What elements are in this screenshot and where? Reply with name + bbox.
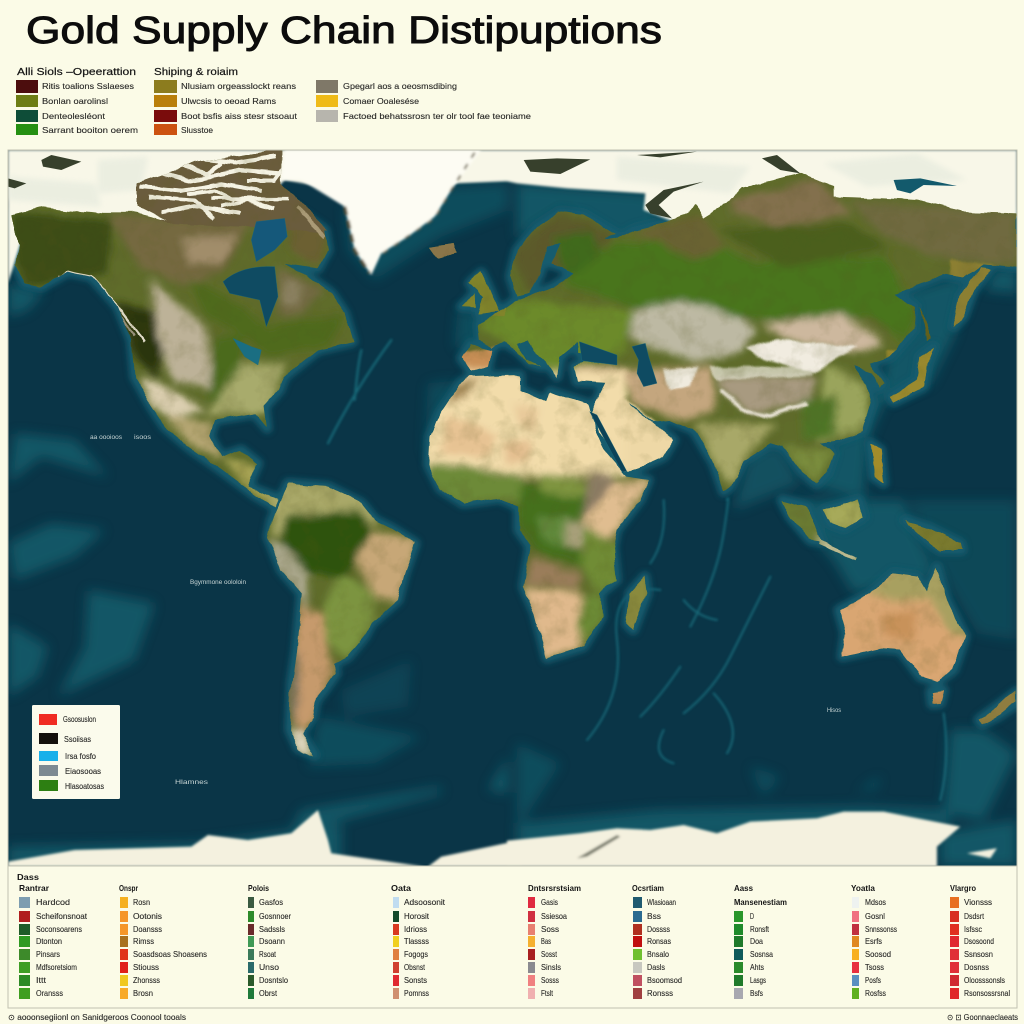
- legend column 8: Mdsos: [865, 898, 886, 907]
- biomes: australia and indonesia: [777, 500, 1020, 727]
- legend column 5: [528, 883, 581, 999]
- legend column 3: Rsoat: [259, 950, 277, 959]
- legend column 6: Dasls: [647, 963, 665, 972]
- biomes: iceland, british isles: [425, 240, 505, 317]
- legend column 1: Oransss: [36, 989, 63, 998]
- legend item: orange: [154, 124, 213, 135]
- legend column 8: Rosfss: [865, 989, 886, 998]
- legend column 8: Posfs: [865, 976, 881, 985]
- map border: [8, 150, 1017, 866]
- legend column 9: Dsdsrt: [964, 912, 985, 921]
- legend column 4: [391, 883, 446, 999]
- legend column 2: [119, 883, 207, 999]
- land mottling: [66, 156, 978, 730]
- legend column 5: Soss: [541, 925, 559, 934]
- legend column 8: Yoatla: [851, 883, 875, 893]
- legend column 9: Isfssc: [964, 925, 982, 934]
- legend column 6: Ocsrtiam: [632, 883, 664, 893]
- legend column 3: Gasfos: [259, 898, 283, 907]
- ocean streaks: [328, 340, 946, 800]
- legend column 2: Rimss: [133, 937, 154, 946]
- greenland: [281, 150, 481, 275]
- legend column 6: Dossss: [647, 925, 670, 934]
- legend column 1: Hardcod: [36, 898, 70, 907]
- legend item: dark red: Boot bsfis aiss stesr stsoaut: [181, 111, 298, 121]
- legend column 2: Zhonsss: [133, 976, 160, 985]
- legend column 9: Rsonsossrsnal: [964, 989, 1010, 998]
- legend header: operations: Alli Siols –Opeerattion: [17, 67, 136, 78]
- legend column 2: Soasdsoas Shoasens: [133, 950, 207, 959]
- legend item: dark teal green: [16, 110, 106, 122]
- legend column 7: Ronsft: [750, 925, 770, 934]
- legend column 8: Snnssonss: [865, 925, 897, 934]
- legend column 3: Dsoann: [259, 937, 285, 946]
- legend column 4: Obsnst: [404, 963, 426, 972]
- legend column 8: Tsoss: [865, 963, 884, 972]
- sea ice: [8, 150, 1017, 283]
- legend column 3: Gosnnoer: [259, 912, 291, 921]
- legend column 3: Obrst: [259, 989, 278, 998]
- legend column 5: Sinsls: [541, 963, 561, 972]
- legend column 2: Ootonis: [133, 912, 162, 921]
- legend column 9: Dosnss: [964, 963, 989, 972]
- legend column 4: Horosit: [404, 912, 430, 921]
- map labels: aa oooioos: [90, 435, 122, 441]
- map labels: Bgymmone oololoin: [190, 580, 246, 586]
- arctic islands to the north: [8, 152, 957, 218]
- legend item: dark maroon: Ritis toalions Sslaeses: [42, 81, 134, 91]
- legend column 6: [632, 883, 682, 999]
- legend column 6: Ronsas: [647, 937, 671, 946]
- legend item: light grey: [316, 110, 531, 122]
- inset legend item: red: Gsoosuslon: [63, 715, 96, 724]
- legend item: green: [16, 124, 138, 135]
- legend column 4: Sonsts: [404, 976, 427, 985]
- ocean shelf currents: [8, 183, 1017, 866]
- legend item: olive: Bonlan oarolinsl: [42, 96, 108, 106]
- legend column 7: Lasgs: [750, 976, 766, 985]
- legend column 6: Wlasioaan: [647, 898, 676, 907]
- footer note right: ⊙ ⊡ Goonnaeclaeats: [947, 1013, 1018, 1022]
- legend item: khaki: [154, 80, 296, 93]
- legend column 1: Ittt: [36, 976, 47, 985]
- legend column 1: Scheifonsnoat: [36, 912, 88, 921]
- bottom legend title: Dass: [17, 872, 39, 882]
- legend column 3: Unso: [259, 963, 280, 972]
- antarctica: [8, 810, 997, 867]
- map labels: [90, 435, 841, 786]
- inset legend item: grey: Eiaosooas: [65, 767, 101, 776]
- legend column 7: Ahts: [750, 963, 764, 972]
- legend column 5: Gasis: [541, 898, 558, 907]
- legend column 3: Polois: [248, 883, 269, 893]
- land: [11, 150, 1016, 756]
- legend column 7: D: [750, 912, 754, 921]
- ocean: [8, 150, 1017, 866]
- legend item: light grey: Factoed behatssrosn ter olr tool fae teoniame: [343, 111, 531, 121]
- inset legend item: sky blue: Irsa fosfo: [65, 752, 97, 761]
- legend column 4: Fogogs: [404, 950, 428, 959]
- inset legend item: green: Hlasoatosas: [65, 782, 104, 791]
- legend column 1: Rantrar: [19, 883, 50, 893]
- legend column 2: Onspr: [119, 883, 139, 893]
- legend column 8: [851, 883, 897, 999]
- shelf glow around land: [11, 173, 1017, 755]
- biomes: south america: [265, 480, 418, 757]
- legend column 3: [248, 883, 291, 999]
- legend item: dark maroon: [16, 80, 134, 93]
- legend column 8: Soosod: [865, 950, 891, 959]
- legend column 9: Dsosoond: [964, 937, 994, 946]
- world map: [8, 150, 1020, 867]
- legend column 4: Oata: [391, 883, 411, 893]
- map labels: Hlamnes: [175, 780, 208, 786]
- legend column 7: Sosnsa: [750, 950, 773, 959]
- legend item: taupe: Gpegarl aos a oeosmsdibing: [343, 81, 457, 91]
- legend item: green: Sarrant booiton oerem: [42, 125, 138, 135]
- legend column 8: Gosnl: [865, 912, 885, 921]
- legend item: dark teal green: Denteolesléont: [42, 111, 106, 121]
- north american mountain coast: [58, 270, 146, 343]
- legend column 3: Dosntslo: [259, 976, 289, 985]
- legend column 4: Pomnss: [404, 989, 429, 998]
- legend column 5: Dntsrsrstsiam: [528, 883, 581, 893]
- inset legend item: black: Ssoiisas: [64, 735, 91, 744]
- legend item: ochre: Ulwcsis to oeoad Rams: [181, 96, 276, 106]
- legend column 4: Idrioss: [404, 925, 427, 934]
- legend column 2: Brosn: [133, 989, 153, 998]
- biomes: eurasia highlights: [664, 340, 857, 415]
- biomes: arabia, spain, islands: [420, 243, 994, 487]
- footer note left: ⊙ aooonsegiionl on Sanidgeroos Coonool tooals: [8, 1013, 186, 1022]
- legend column 5: Ssiesoa: [541, 912, 567, 921]
- legend column 2: Doansss: [133, 925, 162, 934]
- legend column 5: Ftslt: [541, 989, 554, 998]
- legend column 4: Tlassss: [404, 937, 429, 946]
- legend column 7: Doa: [750, 937, 763, 946]
- top legend: [16, 67, 531, 135]
- legend column 9: Ssnsosn: [964, 950, 993, 959]
- legend column 5: Sosst: [541, 950, 558, 959]
- legend column 5: Bas: [541, 937, 551, 946]
- legend item: khaki: Nlusiam orgeasslockt reans: [181, 81, 296, 91]
- legend column 1: Dtonton: [36, 937, 62, 946]
- legend item: dark red: [154, 110, 298, 122]
- biomes: eurasia: [477, 180, 1017, 487]
- legend item: gold: Comaer Ooalesése: [343, 96, 419, 106]
- ice tint: [8, 153, 967, 207]
- legend column 9: [950, 883, 1010, 999]
- legend item: olive: [16, 95, 108, 107]
- legend item: ochre: [154, 95, 276, 107]
- inset map legend: [32, 705, 120, 799]
- legend column 2: Stiouss: [133, 963, 159, 972]
- legend header: shipping: Shiping & roiaim: [154, 67, 238, 78]
- legend column 4: Adsoosonit: [404, 898, 446, 907]
- legend column 6: Bss: [647, 912, 661, 921]
- inland seas: [223, 218, 657, 472]
- map labels: Hisos: [827, 708, 841, 714]
- biomes: arctic islands: [138, 150, 331, 237]
- biomes: africa: [420, 370, 653, 660]
- legend column 6: Bsoomsod: [647, 976, 682, 985]
- legend column 2: Rosn: [133, 898, 150, 907]
- legend item: taupe: [316, 80, 457, 93]
- legend column 8: Esrfs: [865, 937, 882, 946]
- legend column 1: Soconsoarens: [36, 925, 82, 934]
- legend column 7: Aass: [734, 883, 753, 893]
- bottom legend panel: [8, 866, 1017, 1008]
- legend column 6: Ronsss: [647, 989, 673, 998]
- legend column 9: Vlargro: [950, 883, 976, 893]
- legend column 1: Mdfsoretsiom: [36, 963, 77, 972]
- legend column 7: [734, 883, 787, 999]
- legend item: orange: Slusstoe: [181, 125, 213, 135]
- legend column 9: Vionsss: [964, 898, 992, 907]
- legend column 7: Bsfs: [750, 989, 763, 998]
- title: Gold Supply Chain Distipuptions: [26, 10, 662, 52]
- legend column 6: Bnsalo: [647, 950, 669, 959]
- map labels: isoos: [134, 435, 151, 441]
- legend column 5: Sosss: [541, 976, 559, 985]
- biomes: north america: [11, 207, 345, 507]
- legend item: gold: [316, 95, 419, 107]
- legend column 1: Pinsars: [36, 950, 60, 959]
- legend column 9: Oloosssonsls: [964, 976, 1005, 985]
- legend column 1: [19, 883, 88, 999]
- legend column 7: Mansenestiam: [734, 897, 787, 907]
- legend column 3: Sadssls: [259, 925, 285, 934]
